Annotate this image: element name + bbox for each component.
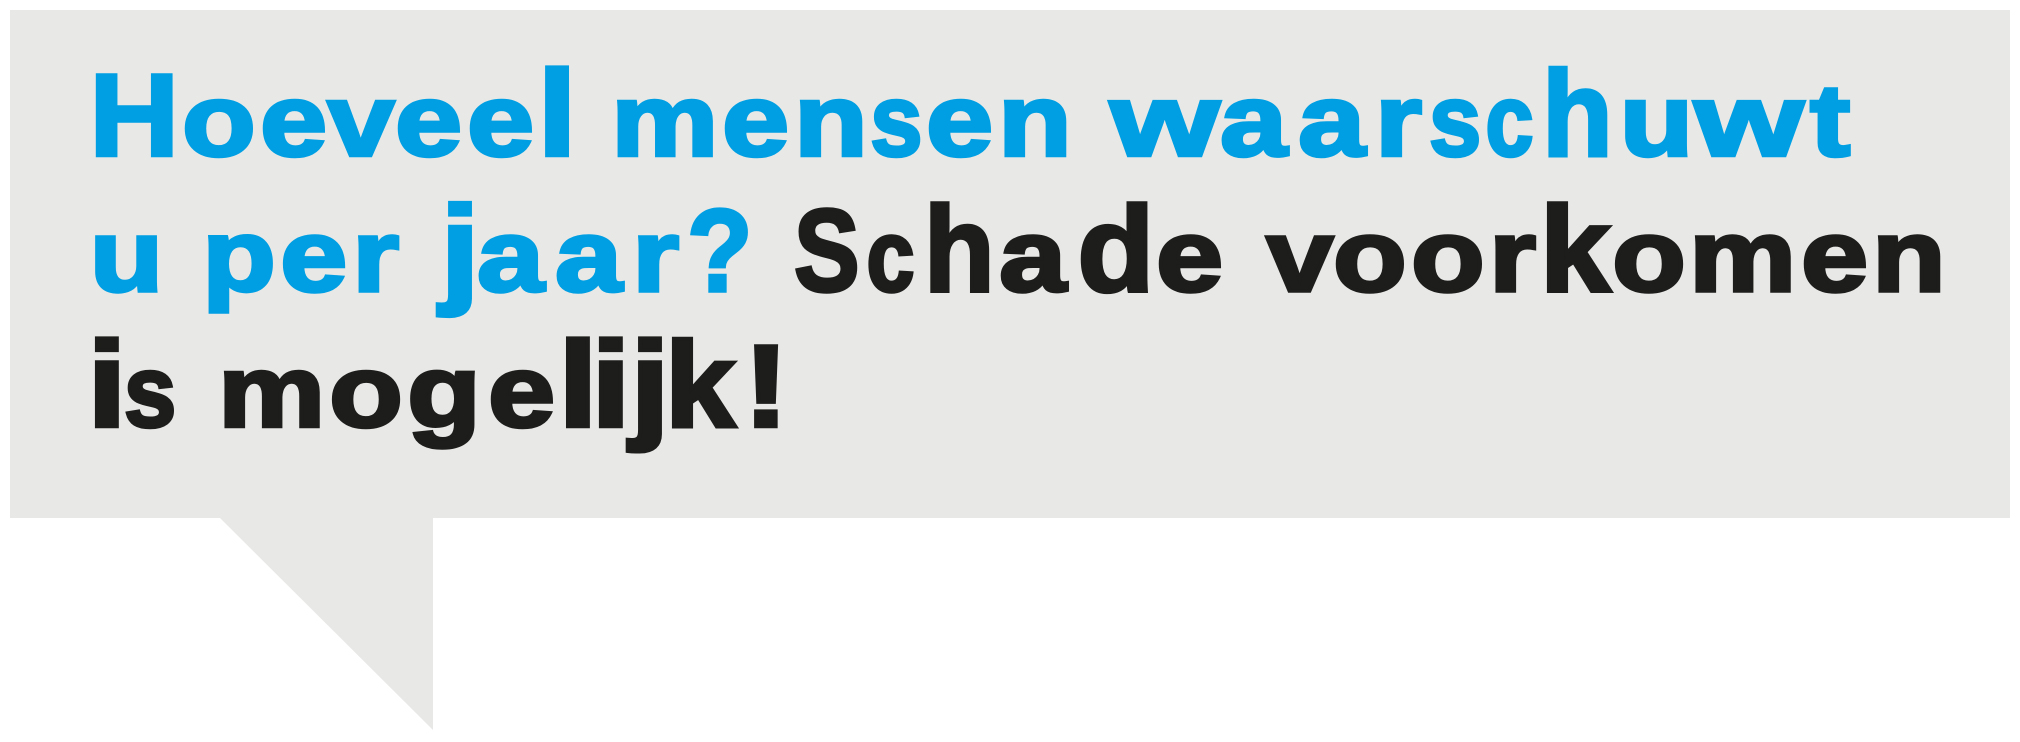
heading line 3: statement end: moge [218,334,555,448]
heading line 1: question: c [1486,63,1534,177]
heading line 3: statement end: ! [743,321,789,452]
heading line 2: question end and statement start: c [866,199,915,313]
heading line 1: question: en [926,63,1072,177]
heading line 3: statement end: k [665,317,736,453]
heading line 1: question: u [1620,63,1693,177]
heading line 2: question end and statement start: d [1077,181,1154,318]
heading line 1: question: H [89,50,179,181]
heading line 2: question end and statement start: voor [1266,199,1536,313]
heading line 2: question end and statement start: aar [477,199,679,313]
heading line 3: statement end: s [124,334,176,448]
heading line 2: question end and statement start: e [1156,199,1223,313]
heading line 3: statement end: lij [558,317,670,453]
heading line 2: question end and statement start: h [924,181,995,318]
heading line 1: question: t [1810,63,1850,177]
heading line 1: question: aar [1220,63,1422,177]
heading line 1: question: s [1429,63,1481,177]
heading line 1: question: h [1542,46,1613,182]
heading line 1: question: s [870,63,923,177]
heading text [87,46,1946,453]
heading line 1: question: oevee [182,63,534,177]
heading line 2: question end and statement start: omen [1612,199,1946,313]
heading line 2: question end and statement start: k [1540,181,1611,318]
heading line 1: question: w [1109,63,1220,177]
heading line 3: statement end: i [87,317,127,453]
heading line 2: question end and statement start: S [794,186,860,317]
heading line 1: question: w [1693,63,1804,177]
heading line 1: question: l [537,46,577,182]
heading line 2: question end and statement start: a [999,199,1067,313]
heading line 2: question end and statement start: j [437,181,480,318]
heading line 2: question end and statement start: u [90,199,163,313]
heading line 2: question end and statement start: ? [687,186,752,317]
heading line 1: question: men [611,63,868,177]
heading line 2: question end and statement start: per [202,199,399,313]
